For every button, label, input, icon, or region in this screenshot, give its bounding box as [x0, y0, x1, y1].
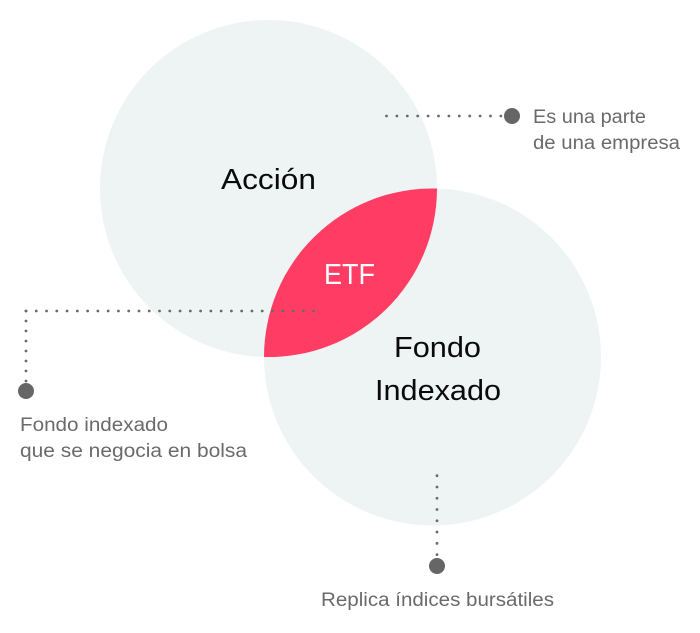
annotation: Fondo indexado que se negocia en bolsa: [20, 415, 247, 462]
label: Fondo Indexado: Fondo: [394, 332, 481, 364]
circle: Fondo Indexado: [264, 188, 601, 526]
annotation: Es una parte de una empresa: de una empresa: [533, 133, 680, 154]
label: Fondo Indexado: [375, 332, 501, 407]
overlap: ETF: [264, 188, 437, 357]
annotation: Fondo indexado que se negocia en bolsa: que se negocia en bolsa: [20, 441, 247, 462]
marker: left dot: [18, 383, 34, 399]
connector: top dotted line: [386, 115, 502, 117]
label: Fondo Indexado: Indexado: [375, 375, 501, 407]
connector: left dotted line: [26, 311, 315, 382]
annotation: Replica índices bursátiles: Replica índices bursátiles: [321, 590, 554, 611]
connector: bottom dotted line: [436, 476, 438, 556]
label: ETF: ETF: [324, 259, 375, 291]
label: Acción: Acción: [221, 164, 316, 196]
annotation: Fondo indexado que se negocia en bolsa: Fondo indexado: [20, 415, 168, 436]
marker: bottom dot: [429, 558, 445, 574]
annotation: Es una parte de una empresa: Es una parte: [533, 107, 646, 128]
circle: Acción: [100, 20, 437, 357]
marker: top dot: [504, 108, 520, 124]
annotation: Es una parte de una empresa: [533, 107, 680, 154]
